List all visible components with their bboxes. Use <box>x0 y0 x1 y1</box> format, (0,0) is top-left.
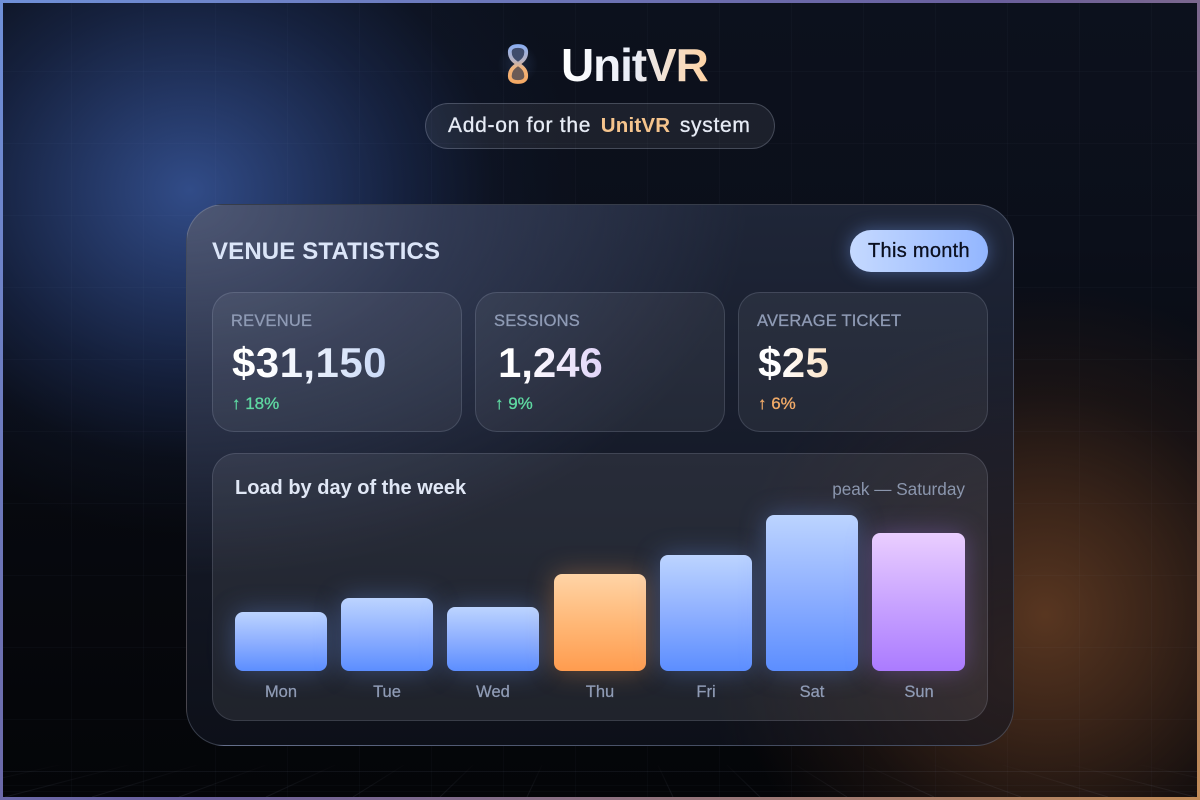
stat: revenue <box>212 292 462 432</box>
bar: Sun <box>872 533 965 671</box>
value: $31,150 <box>232 339 387 386</box>
value: $25 <box>758 339 829 386</box>
day labels: Tue <box>373 683 401 701</box>
value: 1,246 <box>498 339 603 386</box>
change: ↑ 9% <box>495 394 533 413</box>
bar: Thu <box>554 574 646 671</box>
icon: figure eight <box>504 44 533 84</box>
panel: venue statistics card <box>186 204 1014 746</box>
button: this month <box>850 230 988 272</box>
bar: Wed <box>447 607 539 671</box>
stat: sessions <box>475 292 725 432</box>
chart title: Load by day of the week <box>235 477 466 499</box>
heading: VENUE STATISTICS <box>212 238 440 265</box>
day labels: Mon <box>265 683 297 701</box>
day labels: Sun <box>904 683 934 701</box>
day labels: Wed <box>476 683 510 701</box>
tagline pill <box>425 103 775 149</box>
day labels: Fri <box>696 683 716 701</box>
label: REVENUE <box>231 312 312 330</box>
change: ↑ 18% <box>232 394 279 413</box>
day labels: Thu <box>586 683 614 701</box>
logo <box>504 44 533 84</box>
label: AVERAGE TICKET <box>757 312 901 330</box>
change: ↑ 6% <box>758 394 796 413</box>
brand name: UnitVR <box>561 39 708 91</box>
panel: load chart <box>212 453 988 721</box>
bar: Fri <box>660 555 752 671</box>
bar chart <box>222 501 979 686</box>
button: this month: This month <box>868 240 970 262</box>
chart note: peak — Saturday <box>832 479 965 499</box>
tagline text: Add-on for the UnitVR system <box>448 114 751 137</box>
label: SESSIONS <box>494 312 580 330</box>
bar: Sat <box>766 515 858 671</box>
day labels: Sat <box>800 683 824 701</box>
bar: Tue <box>341 598 433 671</box>
bar: Mon <box>235 612 327 671</box>
stat: average ticket <box>738 292 988 432</box>
